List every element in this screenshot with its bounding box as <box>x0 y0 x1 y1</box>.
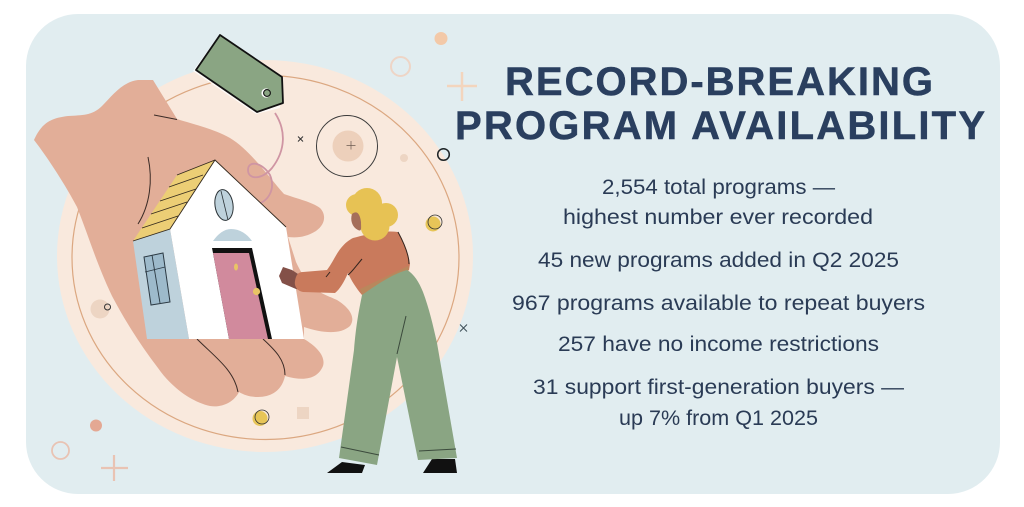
hand crease lines <box>138 115 285 392</box>
title: PROGRAM AVAILABILITY <box>455 104 985 148</box>
hand <box>34 80 352 406</box>
stat: repeat buyers: 967 programs available to repeat buyers <box>512 291 925 315</box>
arched fanlight <box>213 229 252 241</box>
house front <box>170 160 304 339</box>
stat: first-generation buyers: up 7% from Q1 2025 <box>619 406 818 430</box>
trouser lines <box>341 316 456 455</box>
title <box>455 60 985 148</box>
house <box>133 160 304 339</box>
tag string <box>248 113 283 205</box>
price tag <box>193 35 283 114</box>
illustration: hand, house and buyer <box>34 32 477 481</box>
stat: total programs <box>563 175 873 229</box>
door <box>213 253 268 339</box>
roof lines <box>133 160 286 241</box>
ring outline <box>72 76 459 440</box>
side window <box>144 253 170 305</box>
left shoe <box>327 462 365 473</box>
decorative shapes <box>52 32 477 481</box>
stat: first-generation buyers: 31 support first-generation buyers — <box>533 375 905 399</box>
sweater <box>295 231 410 295</box>
buyer figure <box>279 188 457 473</box>
hair <box>346 188 398 240</box>
trousers <box>339 270 457 465</box>
backdrop circle <box>57 60 473 452</box>
oval window <box>213 188 235 222</box>
stat: no income restrictions: 257 have no income restrictions <box>558 332 879 356</box>
stat: first-generation buyers <box>533 375 905 430</box>
door detail and knob <box>234 264 260 295</box>
house side wall <box>133 229 189 339</box>
right shoe <box>423 459 457 473</box>
stat: new programs: 45 new programs added in Q2 2025 <box>538 248 899 272</box>
hand on house <box>279 267 304 290</box>
sweater fold lines <box>326 232 409 277</box>
title: RECORD-BREAKING <box>505 60 933 104</box>
stat: total programs: 2,554 total programs — <box>602 175 836 199</box>
stat: total programs: highest number ever recorded <box>563 205 873 229</box>
belt <box>360 266 409 296</box>
door frame <box>212 248 272 339</box>
face <box>351 212 361 231</box>
roof <box>133 160 215 241</box>
